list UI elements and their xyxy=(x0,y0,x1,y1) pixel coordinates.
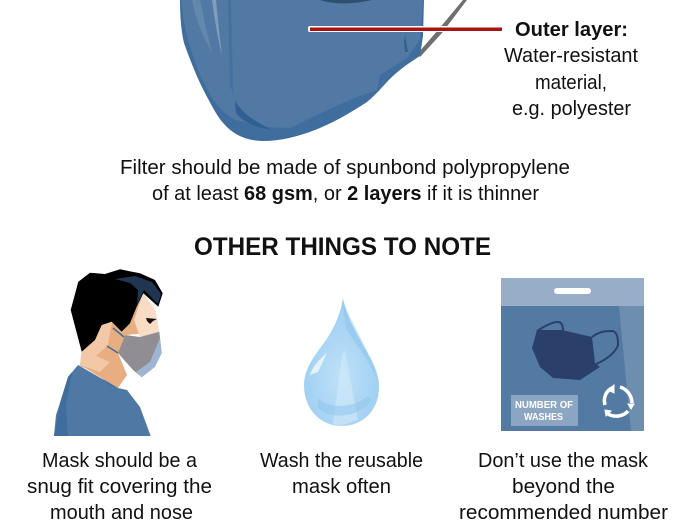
text block: snug fit caption: Mask should be a xyxy=(42,450,198,472)
text block: washing caption: mask often xyxy=(292,476,391,498)
text block: filter guidance: Filter should be made of spunbond polypropylene xyxy=(120,157,570,179)
illustration: person wearing mask xyxy=(54,269,163,436)
icon: water drop xyxy=(304,298,379,426)
callout line: outer layer pointer xyxy=(308,26,502,32)
text block: reuse limit caption xyxy=(459,450,668,523)
text block: snug fit caption: snug fit covering the xyxy=(27,476,212,498)
text block: washing caption xyxy=(260,450,423,498)
icon: pack hang hole xyxy=(554,288,591,294)
text block: outer layer label xyxy=(504,19,638,120)
text block: outer layer label: e.g. polyester xyxy=(512,98,631,120)
icon: recycle arrows xyxy=(604,385,634,416)
label box: number of washes xyxy=(511,395,578,426)
text block: reuse limit caption: beyond the xyxy=(512,476,615,498)
text block: filter guidance xyxy=(120,157,570,205)
text block: snug fit caption xyxy=(27,450,212,523)
label box: number of washes: NUMBER OF xyxy=(515,400,573,411)
illustration: outer layer of mask xyxy=(180,0,467,141)
illustration: mask packaging xyxy=(501,278,644,431)
heading: other things to note: OTHER THINGS TO NOTE xyxy=(194,233,491,261)
text block: outer layer label: Water-resistant xyxy=(504,45,638,67)
text block: outer layer label: material, xyxy=(535,72,607,94)
text block: outer layer label: Outer layer: xyxy=(515,19,628,41)
text block: reuse limit caption: Don’t use the mask xyxy=(478,450,649,472)
text block: washing caption: Wash the reusable xyxy=(260,450,423,472)
icon: face mask on pack xyxy=(532,322,618,380)
label box: number of washes: WASHES xyxy=(524,412,563,423)
text block: filter guidance: of at least 68 gsm, or 2 layers if it is thinner xyxy=(152,183,539,205)
